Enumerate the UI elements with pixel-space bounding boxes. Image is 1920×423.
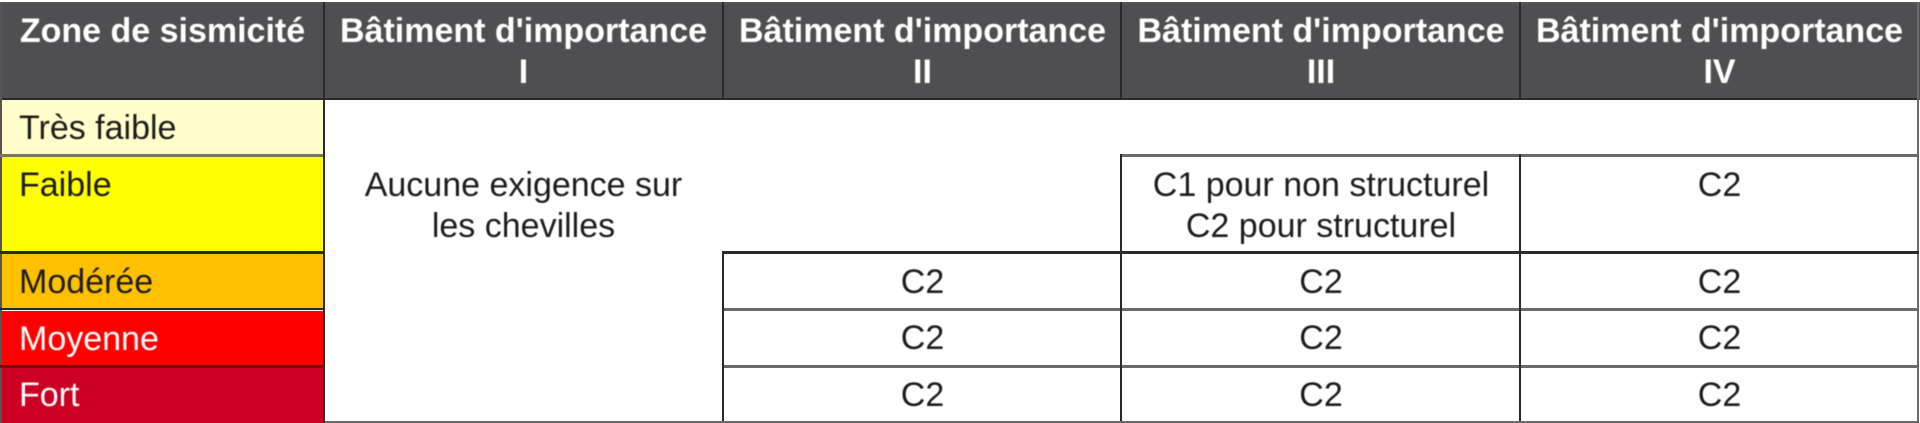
heading: bâtiment d'importance II: II: [913, 53, 932, 91]
zone: très faible: [0, 100, 323, 154]
heading: bâtiment d'importance I: [340, 12, 707, 91]
heading: bâtiment d'importance III: Bâtiment d'importance: [1137, 12, 1505, 50]
heading: bâtiment d'importance II: [739, 12, 1106, 91]
text: aucune exigence: les chevilles: [432, 207, 615, 245]
zone: fort: Fort: [19, 376, 79, 414]
heading: bâtiment d'importance III: [1137, 12, 1505, 91]
heading: bâtiment d'importance II: Bâtiment d'importance: [739, 12, 1106, 50]
zone: faible: [0, 157, 323, 251]
text: aucune exigence: [364, 166, 682, 245]
heading: bâtiment d'importance I: I: [519, 53, 528, 91]
cell: C1 / C2 bâtiment III faible: [1153, 166, 1489, 245]
cell: C2 bâtiment II moyenne: C2: [901, 319, 944, 357]
zone: modérée: [0, 254, 323, 308]
zone: moyenne: Moyenne: [19, 320, 159, 358]
heading: bâtiment d'importance IV: Bâtiment d'importance: [1536, 12, 1903, 50]
cell: C1 / C2 bâtiment III faible: C1 pour non structurel: [1153, 166, 1489, 204]
cell: C2 bâtiment IV moyenne: C2: [1698, 319, 1741, 357]
cell: C2 bâtiment IV fort: C2: [1698, 376, 1741, 414]
cell: C2 bâtiment IV faible: C2: [1698, 166, 1741, 204]
cell: C2 bâtiment III moyenne: C2: [1299, 319, 1343, 357]
heading: bâtiment d'importance III: III: [1307, 53, 1335, 91]
zone: modérée: Modérée: [19, 263, 153, 301]
zone: moyenne: [0, 311, 323, 365]
cell: C2 bâtiment II fort: C2: [901, 376, 944, 414]
heading: bâtiment d'importance I: Bâtiment d'importance: [340, 12, 707, 50]
cell: C2 bâtiment II modérée: C2: [901, 263, 944, 301]
text: aucune exigence: Aucune exigence sur: [365, 166, 682, 204]
cell: C1 / C2 bâtiment III faible: C2 pour structurel: [1186, 207, 1456, 245]
cell: C2 bâtiment III fort: C2: [1299, 376, 1343, 414]
zone: fort: [0, 368, 323, 423]
header row: [0, 3, 1920, 100]
cell: C2 bâtiment III modérée: C2: [1299, 263, 1343, 301]
heading: bâtiment d'importance IV: [1536, 12, 1903, 91]
zone: très faible: Très faible: [19, 109, 176, 147]
cell: C2 bâtiment IV modérée: C2: [1698, 263, 1741, 301]
zone: faible: Faible: [19, 166, 112, 204]
heading: zone de sismicité: Zone de sismicité: [20, 12, 305, 50]
heading: bâtiment d'importance IV: IV: [1703, 53, 1736, 91]
